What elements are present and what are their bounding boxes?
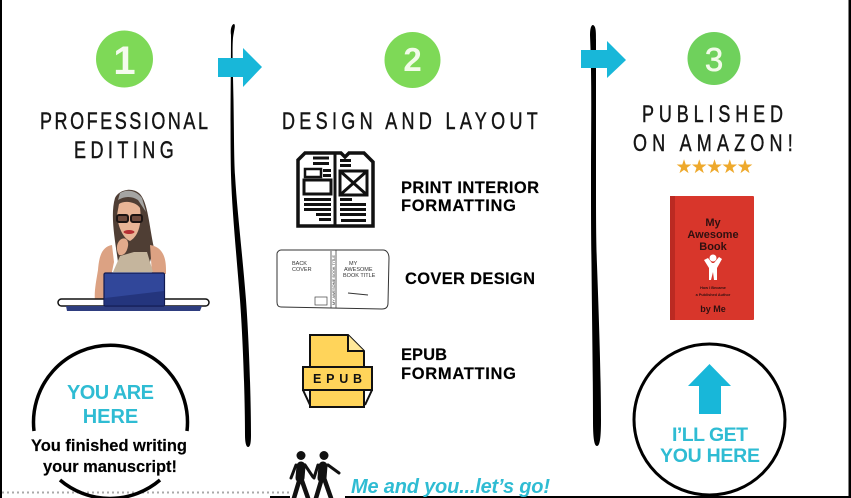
desk <box>58 299 209 306</box>
callout: you are here <box>31 345 188 498</box>
laptop <box>104 273 164 306</box>
caption: me and you: Me and you...let’s go! <box>351 476 550 498</box>
label: epub formatting: EPUB <box>401 346 447 364</box>
dotted ground line <box>2 492 292 494</box>
icon: cover design sketch: AWESOME <box>344 267 373 273</box>
step 1 number badge <box>96 30 153 88</box>
label: epub formatting <box>401 346 516 383</box>
hand <box>117 238 128 255</box>
step 1 heading: PROFESSIONAL <box>40 109 208 135</box>
icon: cover design sketch: COVER <box>292 267 312 273</box>
arrow: step 2 to 3 <box>581 41 626 78</box>
callout: you are here: your manuscript! <box>43 458 177 476</box>
author at laptop illustration <box>58 190 209 311</box>
icon: two people walking <box>291 451 339 498</box>
icon: EPUB file <box>303 335 372 407</box>
red book cover: a Published Author <box>696 293 731 297</box>
hair <box>113 190 154 262</box>
red book cover: by Me <box>700 304 726 314</box>
callout: you are here: HERE <box>83 406 138 428</box>
callout: you are here: You finished writing <box>31 437 187 455</box>
label: cover design: COVER DESIGN <box>405 270 535 288</box>
step 2 heading: DESIGN AND LAYOUT <box>282 109 538 135</box>
callout: I'll get you here <box>634 344 785 495</box>
callout: I'll get you here: I’LL GET <box>672 424 748 446</box>
top <box>113 252 153 272</box>
step 3 heading: ON AMAZON! <box>633 131 793 157</box>
step 3 heading: PUBLISHED <box>642 102 783 128</box>
step 2 number badge <box>384 32 440 88</box>
red book cover: My <box>705 217 722 229</box>
five star rating: ★★★★★ <box>676 157 754 178</box>
red book cover: Book <box>699 241 728 253</box>
lips <box>124 230 134 234</box>
icon: cover design sketch: MY <box>349 261 358 267</box>
arms and shoulders <box>95 245 166 301</box>
icon: cover design sketch <box>277 250 389 309</box>
step 3 heading <box>633 102 793 157</box>
step 1 heading: EDITING <box>74 138 174 164</box>
label: print interior formatting <box>401 179 539 215</box>
face <box>117 202 141 241</box>
callout: you are here: YOU ARE <box>67 382 154 404</box>
icon: cover design sketch: BOOK TITLE <box>343 273 376 279</box>
icon: EPUB file: EPUB <box>313 372 362 386</box>
red book cover <box>670 196 754 320</box>
glasses <box>117 215 142 222</box>
divider 1 <box>231 24 251 447</box>
step 1 heading <box>40 109 208 164</box>
arrow: step 1 to 2 <box>218 48 262 87</box>
icon: cover design sketch: MY AWESOME BOOK TITLE <box>332 255 336 305</box>
label: print interior formatting: FORMATTING <box>401 197 516 215</box>
step 3 number badge <box>688 32 740 85</box>
step 3 number badge: 3 <box>705 41 723 78</box>
step 2 number badge: 2 <box>403 41 422 78</box>
label: print interior formatting: PRINT INTERIOR <box>401 179 539 197</box>
icon: cover design sketch: BACK <box>292 261 307 267</box>
step 1 number badge: 1 <box>113 39 136 83</box>
red book cover: Awesome <box>687 229 739 241</box>
divider 2 <box>590 25 601 446</box>
label: epub formatting: FORMATTING <box>401 365 516 383</box>
icon: print interior layout <box>298 153 373 226</box>
callout: I'll get you here: YOU HERE <box>660 445 760 467</box>
red book cover: How I Became <box>700 286 726 290</box>
